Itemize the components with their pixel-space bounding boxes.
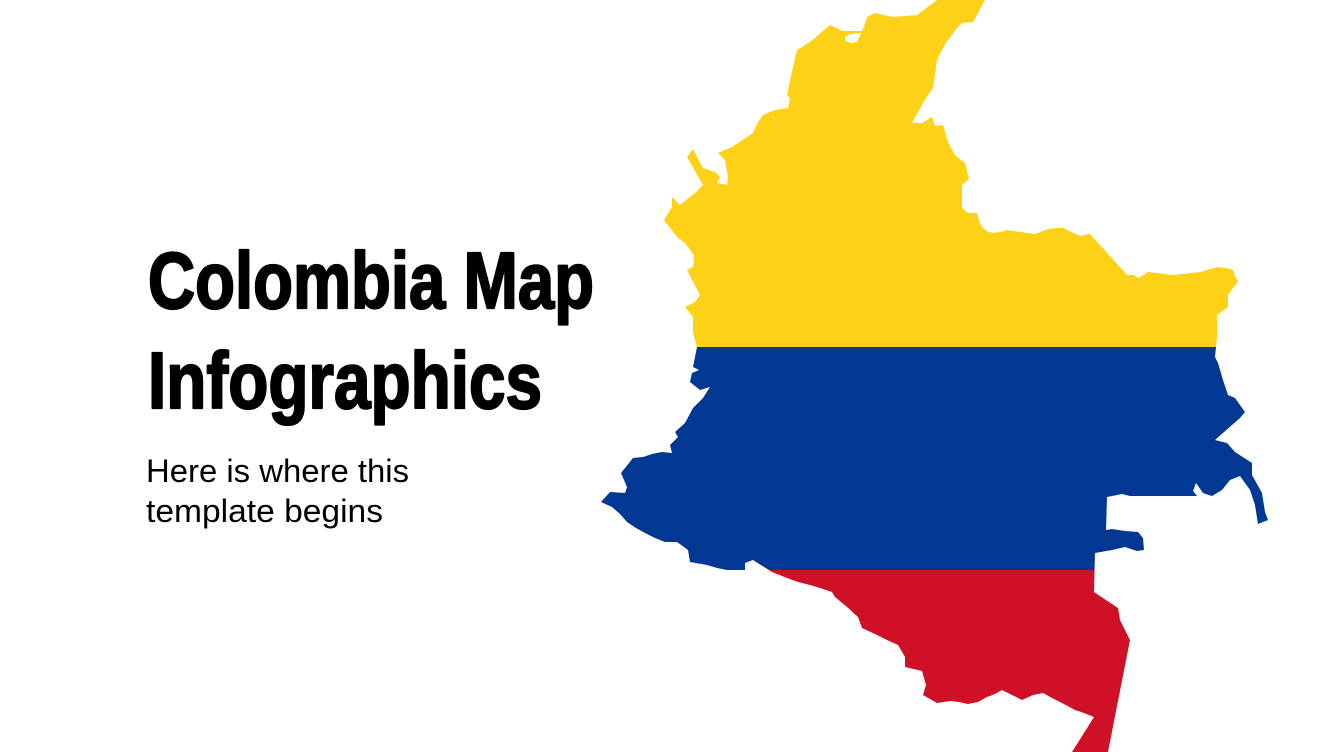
title: Colombia Map xyxy=(148,236,594,325)
subtitle: Here is where this xyxy=(146,453,409,489)
map band: blue xyxy=(590,347,1290,570)
subtitle: template begins xyxy=(146,493,383,529)
title: Infographics xyxy=(148,336,542,425)
subtitle xyxy=(146,453,409,529)
title xyxy=(148,236,594,425)
map band: yellow xyxy=(664,0,1238,347)
map: Colombia in flag colours xyxy=(590,0,1290,752)
lagoon on the north coast xyxy=(845,33,861,43)
map band: red xyxy=(769,570,1130,752)
